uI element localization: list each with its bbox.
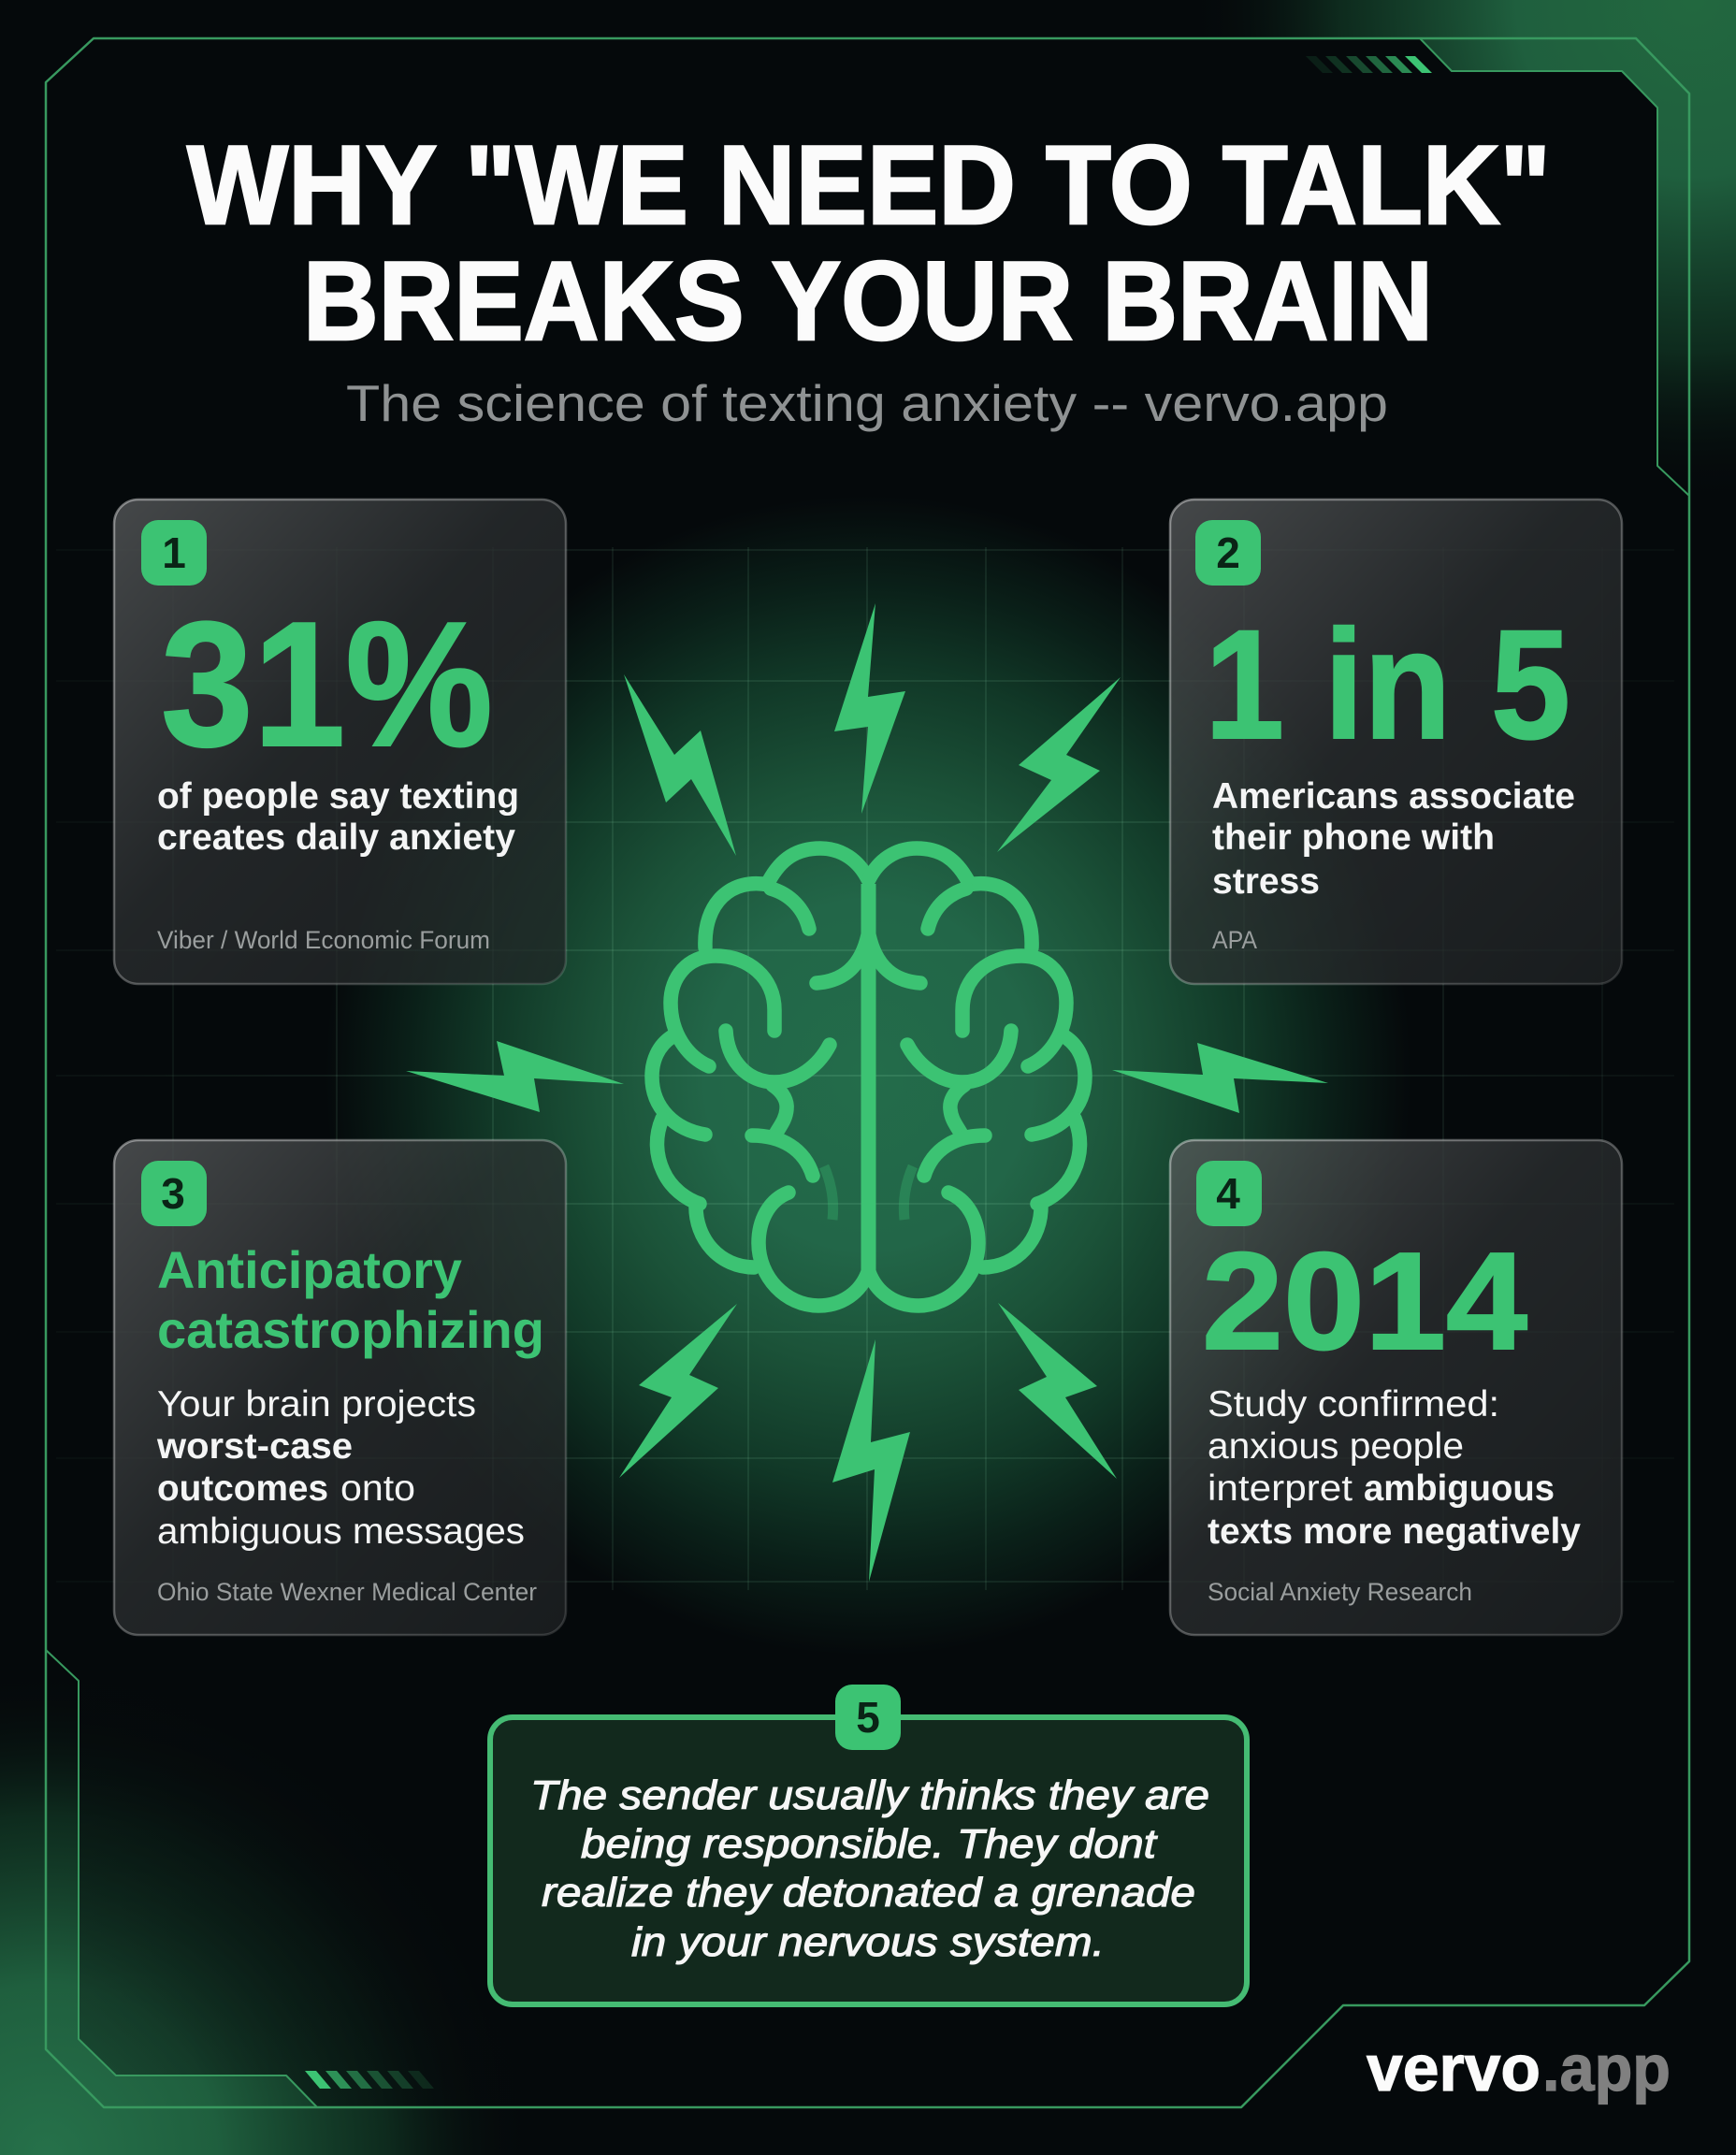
footer logo: vervo.app: .app [1542, 2032, 1671, 2104]
quote text: The sender usually thinks they are [530, 1772, 1209, 1818]
stat: 31%: 31% [161, 586, 493, 784]
source: Viber / World Economic Forum [157, 926, 490, 954]
stat description: their phone with [1212, 817, 1495, 858]
badge 2: 2 [1216, 528, 1240, 577]
badge 3 [141, 1161, 207, 1226]
bolt: bottom left [619, 1304, 737, 1478]
panel: stat 4 [1170, 1140, 1622, 1635]
stat description [1212, 776, 1575, 902]
callout: sender quote [490, 1685, 1247, 2004]
stat: 1 in 5: 1 in 5 [1205, 599, 1570, 772]
quote text: being responsible. They dont [581, 1821, 1158, 1867]
stat description [157, 776, 519, 858]
stat description: stress [1212, 861, 1320, 902]
title: BREAKS YOUR BRAIN [303, 239, 1433, 364]
footer logo: vervo.app: vervo [1367, 2032, 1541, 2104]
bolt: top left [624, 674, 736, 856]
bolt: left [406, 1041, 624, 1112]
bolt: bottom right [998, 1303, 1117, 1479]
footer logo: vervo.app [1367, 2032, 1671, 2104]
panel: stat 3 [114, 1140, 566, 1635]
source: Social Anxiety Research [1208, 1578, 1472, 1606]
description: worst-case [156, 1426, 353, 1467]
stat: 2014: 2014 [1202, 1224, 1527, 1379]
icon: brain [652, 848, 1085, 1306]
description: ambiguous messages [157, 1511, 525, 1552]
heading: anticipatory catastrophizing [157, 1240, 544, 1359]
bolt: bottom [832, 1339, 910, 1582]
panel: stat 2 [1170, 499, 1622, 984]
description: anxious people [1208, 1426, 1464, 1467]
stat description: creates daily anxiety [157, 817, 515, 858]
hud stripes bottom left [305, 2071, 434, 2089]
badge 5 [835, 1685, 901, 1750]
badge 1 [141, 520, 207, 586]
badge 3: 3 [161, 1169, 185, 1218]
description: ambiguous [1364, 1468, 1555, 1509]
source: Ohio State Wexner Medical Center [157, 1578, 537, 1606]
description: texts more negatively [1208, 1511, 1581, 1552]
description: interpret [1208, 1468, 1353, 1509]
description [1208, 1384, 1581, 1552]
badge 5: 5 [856, 1693, 880, 1742]
central brain glow [326, 496, 1410, 1656]
title: WHY "WE NEED TO TALK" [187, 123, 1551, 248]
quote text: realize they detonated a grenade [542, 1870, 1195, 1916]
description [156, 1384, 525, 1552]
description: Study confirmed: [1208, 1384, 1499, 1425]
description: onto [340, 1468, 415, 1509]
badge 1: 1 [162, 528, 186, 577]
quote text: in your nervous system. [631, 1919, 1105, 1965]
stat description: of people say texting [157, 776, 519, 817]
source: APA [1212, 926, 1257, 954]
lightning bolts radiating from brain [406, 603, 1328, 1582]
badge 4 [1196, 1161, 1262, 1226]
bolt: top right [997, 677, 1121, 852]
badge 2 [1195, 520, 1261, 586]
panel: stat 1 [114, 499, 566, 984]
bolt: top [834, 603, 905, 814]
description: Your brain projects [157, 1384, 476, 1425]
heading: anticipatory catastrophizing: Anticipatory [157, 1240, 462, 1299]
badge 4: 4 [1216, 1169, 1240, 1218]
description: outcomes [157, 1468, 328, 1509]
quote text [530, 1772, 1209, 1965]
subtitle: The science of texting anxiety -- vervo.app [346, 374, 1388, 432]
stat description: Americans associate [1212, 776, 1575, 817]
bolt: right [1112, 1043, 1328, 1113]
title [187, 123, 1551, 364]
heading: anticipatory catastrophizing: catastrophizing [157, 1300, 544, 1359]
hud stripes top right [1306, 56, 1432, 73]
